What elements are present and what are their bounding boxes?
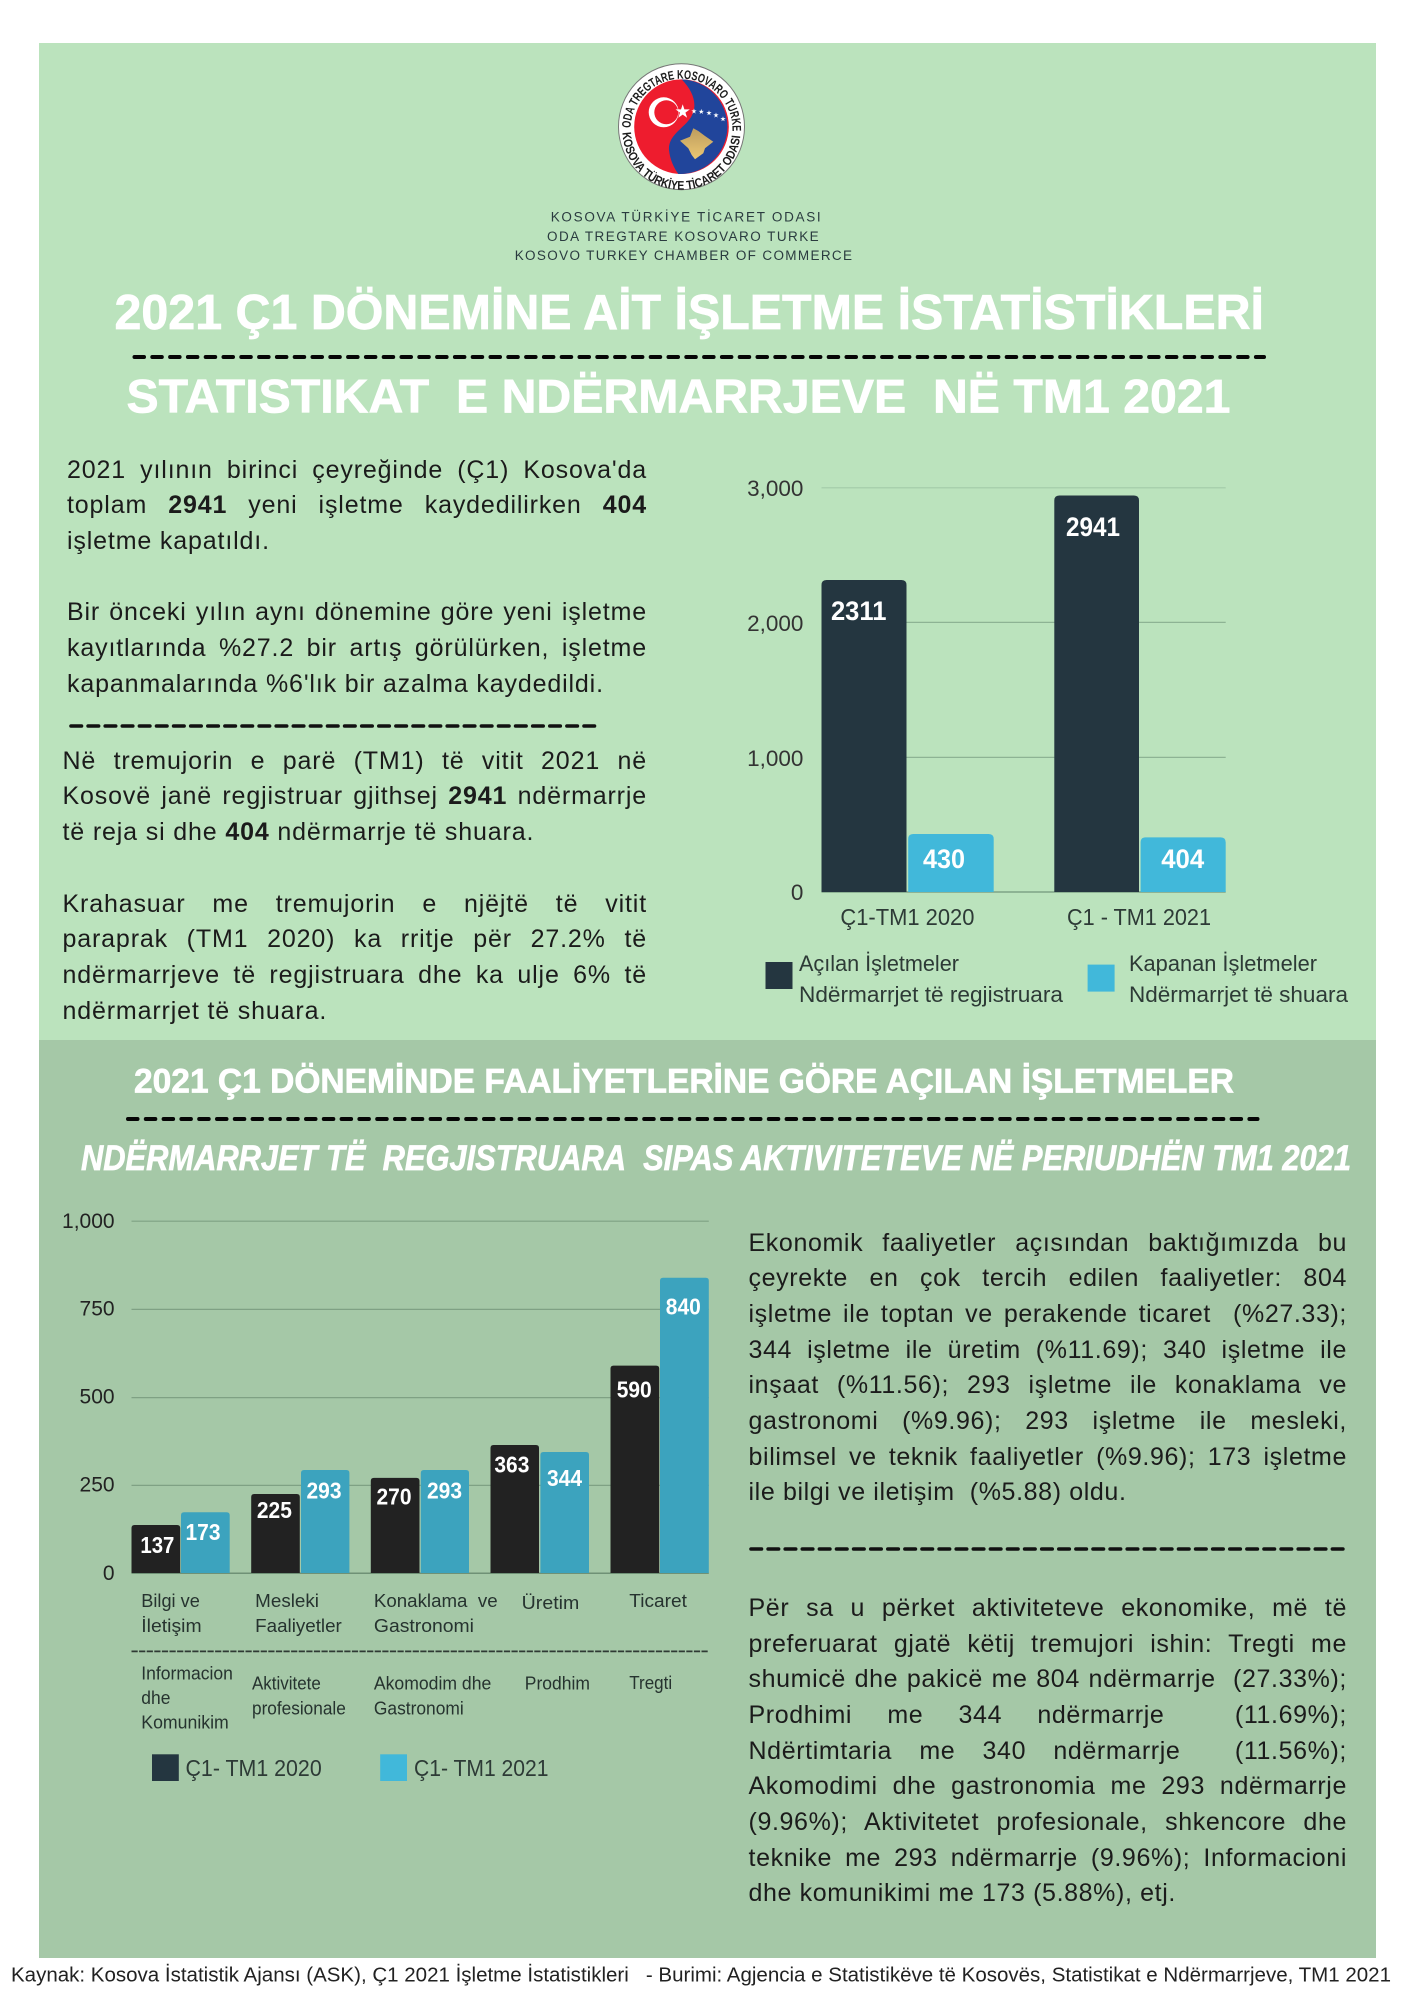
text block: Turkish summary, new and closed businesses: toplam 2941 yeni işletme kaydedilirken 404 bbox=[67, 491, 647, 519]
category labels: Ç1-TM1 2020 bbox=[840, 904, 974, 930]
text: chamber name in three languages: KOSOVO TURKEY CHAMBER OF COMMERCE bbox=[515, 248, 852, 263]
bars: Ç1-TM1 2020 bbox=[822, 580, 994, 892]
text block: Albanian summary, new and closed enterprises: të reja si dhe 404 ndërmarrje të shuara. bbox=[62, 818, 534, 846]
bars: Ticaret: 840 bbox=[666, 1294, 701, 1320]
text block: Albanian activity breakdown: Ndërtimtaria me 340 ndërmarrje (11.56%); bbox=[748, 1737, 1347, 1765]
category labels: Turkish: Mesleki bbox=[255, 1590, 319, 1611]
y axis labels: 3,000 bbox=[747, 476, 803, 501]
category labels: Albanian: Komunikim bbox=[141, 1712, 229, 1733]
y axis labels: 0 bbox=[791, 880, 803, 905]
y axis labels: 0 bbox=[103, 1562, 115, 1585]
legend: opened businesses bbox=[766, 951, 1064, 1007]
category labels: Albanian: Aktivitete bbox=[252, 1673, 321, 1694]
legend: opened businesses: Açılan İşletmeler bbox=[799, 951, 959, 976]
category labels: Albanian: Akomodim dhe bbox=[374, 1673, 491, 1694]
heading: Turkish title: 2021 Ç1 DÖNEMİNE AİT İŞLETME İSTATİSTİKLERİ bbox=[114, 286, 1264, 340]
panel: top section, overall statistics bbox=[39, 43, 1376, 1040]
text block: Albanian year-on-year comparison: ndërmarrjeve të regjistruara dhe ka ulje 6% të bbox=[62, 961, 647, 989]
text block: Turkish activity breakdown: bilimsel ve teknik faaliyetler (%9.96); 173 işletme bbox=[748, 1443, 1347, 1471]
text block: Turkish activity breakdown: işletme ile toptan ve perakende ticaret (%27.33); bbox=[748, 1300, 1347, 1328]
category labels: Turkish: Faaliyetler bbox=[255, 1615, 342, 1636]
category labels: Albanian: profesionale bbox=[252, 1698, 346, 1718]
text block: Turkish year-on-year comparison: kayıtlarında %27.2 bir artış görülürken, işletme bbox=[67, 634, 647, 662]
text: chamber name in three languages: ODA TREGTARE KOSOVARO TURKE bbox=[547, 229, 819, 244]
category labels: Albanian: dhe bbox=[141, 1687, 170, 1708]
y axis labels: 1,000 bbox=[747, 746, 803, 771]
text block: Albanian summary, new and closed enterprises bbox=[62, 746, 647, 846]
text block: Albanian activity breakdown: shumicë dhe pakicë me 804 ndërmarrje (27.33%); bbox=[748, 1665, 1347, 1693]
text block: Albanian year-on-year comparison: paraprak (TM1 2020) ka rritje për 27.2% të bbox=[62, 925, 647, 953]
bars: Mesleki Faaliyetler: 225 bbox=[257, 1497, 292, 1523]
category labels: Albanian: Gastronomi bbox=[374, 1698, 464, 1718]
text block: Turkish year-on-year comparison bbox=[67, 598, 647, 698]
category labels: Albanian bbox=[141, 1662, 672, 1733]
category labels: Turkish: Ticaret bbox=[629, 1590, 687, 1611]
category labels: Turkish: Konaklama ve bbox=[374, 1590, 498, 1611]
text block: Turkish summary, new and closed businesses: işletme kapatıldı. bbox=[67, 527, 270, 555]
bars: Üretim: 363 bbox=[494, 1451, 529, 1477]
y axis labels: 2,000 bbox=[747, 611, 803, 636]
bar chart: opened and closed businesses by quarter bbox=[747, 476, 1349, 1007]
bars: Ç1 - TM1 2021 bbox=[1054, 496, 1226, 892]
legend: closed businesses bbox=[1088, 951, 1349, 1007]
text block: Albanian year-on-year comparison: ndërmarrjet të shuara. bbox=[62, 997, 327, 1025]
bars: Bilgi ve İletişim bbox=[132, 1512, 230, 1573]
bars: Ç1-TM1 2020: 430 bbox=[923, 844, 965, 874]
legend: opened businesses: Ndërmarrjet të regjistruara bbox=[799, 982, 1064, 1007]
icon: chamber of commerce logo bbox=[618, 63, 745, 190]
text block: Albanian summary, new and closed enterprises: Në tremujorin e parë (TM1) të vitit 2021 në bbox=[62, 746, 647, 774]
bars: Ç1 - TM1 2021: 2941 bbox=[1066, 512, 1120, 542]
category labels: Albanian: Informacion bbox=[141, 1662, 233, 1683]
category labels bbox=[840, 904, 1211, 930]
text block: Turkish activity breakdown: 344 işletme ile üretim (%11.69); 340 işletme ile bbox=[748, 1336, 1347, 1364]
text block: Turkish year-on-year comparison: Bir önceki yılın aynı dönemine göre yeni işletme bbox=[67, 598, 647, 626]
bars: Ç1-TM1 2020: 2311 bbox=[831, 596, 886, 626]
panel: bottom section, new businesses by activity bbox=[39, 1040, 1376, 1958]
text block: Turkish year-on-year comparison: kapanmalarında %6'lık bir azalma kaydedildi. bbox=[67, 670, 604, 698]
text block: Turkish activity breakdown: ile bilgi ve iletişim (%5.88) oldu. bbox=[748, 1478, 1127, 1506]
y axis labels: 750 bbox=[80, 1298, 115, 1320]
y axis labels bbox=[747, 476, 803, 905]
legend: closed businesses: Ndërmarrjet të shuara bbox=[1129, 982, 1349, 1007]
y axis labels: 250 bbox=[80, 1474, 115, 1496]
category labels: Ç1 - TM1 2021 bbox=[1067, 904, 1211, 930]
category labels: Turkish: İletişim bbox=[141, 1615, 202, 1636]
bars: Mesleki Faaliyetler: 293 bbox=[306, 1477, 342, 1503]
text block: Turkish summary, new and closed businesses bbox=[67, 456, 647, 555]
text block: Albanian activity breakdown: Prodhimi me 344 ndërmarrje (11.69%); bbox=[748, 1701, 1347, 1729]
bars: Konaklama ve Gastronomi: 293 bbox=[427, 1477, 462, 1503]
category labels: Turkish: Bilgi ve bbox=[141, 1590, 200, 1611]
text block: Turkish activity breakdown: çeyrekte en çok tercih edilen faaliyetler: 804 bbox=[748, 1264, 1347, 1292]
bars: Konaklama ve Gastronomi: 270 bbox=[376, 1484, 412, 1510]
bars: Üretim: 344 bbox=[547, 1465, 582, 1491]
icon: chamber of commerce logo: ODA TREGTARE KOSOVARO TURKE bbox=[622, 70, 742, 131]
bars: Bilgi ve İletişim: 137 bbox=[140, 1532, 174, 1558]
bars: Ticaret: 590 bbox=[617, 1377, 652, 1403]
category labels: Turkish bbox=[141, 1590, 687, 1636]
category labels: Albanian: Tregti bbox=[629, 1672, 672, 1693]
category labels: Albanian: Prodhim bbox=[525, 1673, 590, 1694]
y axis labels bbox=[62, 1210, 115, 1585]
text block: Albanian year-on-year comparison bbox=[62, 890, 647, 1025]
text block: Albanian activity breakdown bbox=[748, 1594, 1347, 1907]
text block: Turkish activity breakdown: inşaat (%11.56); 293 işletme ile konaklama ve bbox=[748, 1371, 1347, 1399]
text block: Albanian year-on-year comparison: Krahasuar me tremujorin e njëjtë të vitit bbox=[62, 890, 647, 918]
bars: Konaklama ve Gastronomi bbox=[371, 1470, 469, 1573]
bars: Ticaret bbox=[610, 1278, 709, 1573]
text block: Albanian activity breakdown: dhe komunikimi me 173 (5.88%), etj. bbox=[748, 1879, 1176, 1907]
bar chart: new businesses by activity, 2020 vs 2021 bbox=[62, 1210, 709, 1781]
text block: Albanian summary, new and closed enterprises: Kosovë janë regjistruar gjithsej 2941 ndërmarrje bbox=[62, 782, 647, 810]
text block: Turkish activity breakdown: gastronomi (%9.96); 293 işletme ile mesleki, bbox=[748, 1407, 1347, 1435]
text block: Albanian activity breakdown: (9.96%); Aktivitetet profesionale, shkencore dhe bbox=[748, 1808, 1347, 1836]
text block: Albanian activity breakdown: Akomodimi dhe gastronomia me 293 ndërmarrje bbox=[748, 1772, 1347, 1800]
text block: Turkish activity breakdown: Ekonomik faaliyetler açısından baktığımızda bu bbox=[748, 1228, 1347, 1256]
text: chamber name in three languages: KOSOVA TÜRKİYE TİCARET ODASI bbox=[551, 210, 821, 224]
footer: data source: Kaynak: Kosova İstatistik Ajansı (ASK), Ç1 2021 İşletme İstatistikleri - Burimi: Agjencia e Statistikëve të Kosovës, Statistikat e Ndërmarrjeve, TM1 2021 bbox=[11, 1964, 1391, 1987]
icon: chamber of commerce logo: KOSOVA TÜRKİYE TİCARET ODASI bbox=[622, 132, 740, 190]
heading: Turkish section title: 2021 Ç1 DÖNEMİNDE FAALİYETLERİNE GÖRE AÇILAN İŞLETMELER bbox=[134, 1062, 1234, 1101]
legend: Ç1- TM1 2020: Ç1- TM1 2020 bbox=[186, 1755, 322, 1781]
text block: Albanian activity breakdown: Për sa u përket aktiviteteve ekonomike, më të bbox=[748, 1594, 1347, 1622]
category labels: Turkish: Gastronomi bbox=[374, 1615, 474, 1636]
bars: Bilgi ve İletişim: 173 bbox=[186, 1519, 220, 1545]
bars: Ç1 - TM1 2021: 404 bbox=[1161, 844, 1204, 874]
text block: Turkish activity breakdown bbox=[748, 1228, 1347, 1506]
text block: Albanian activity breakdown: teknike me 293 ndërmarrje (9.96%); Informacioni bbox=[748, 1844, 1347, 1872]
text block: Turkish summary, new and closed businesses: 2021 yılının birinci çeyreğinde (Ç1) Kosova'da bbox=[67, 456, 647, 484]
text: chamber name in three languages bbox=[515, 209, 852, 263]
legend: closed businesses: Kapanan İşletmeler bbox=[1129, 951, 1317, 976]
bars: Üretim bbox=[490, 1445, 589, 1573]
heading: Albanian title: STATISTIKAT E NDËRMARRJEVE NË TM1 2021 bbox=[126, 370, 1230, 423]
bars: Mesleki Faaliyetler bbox=[251, 1470, 349, 1573]
legend: Ç1- TM1 2021: Ç1- TM1 2021 bbox=[414, 1755, 548, 1781]
y axis labels: 1,000 bbox=[62, 1210, 115, 1233]
y axis labels: 500 bbox=[80, 1386, 115, 1409]
category labels: Turkish: Üretim bbox=[522, 1592, 579, 1613]
text block: Albanian activity breakdown: preferuarat gjatë këtij tremujori ishin: Tregti me bbox=[748, 1630, 1347, 1658]
